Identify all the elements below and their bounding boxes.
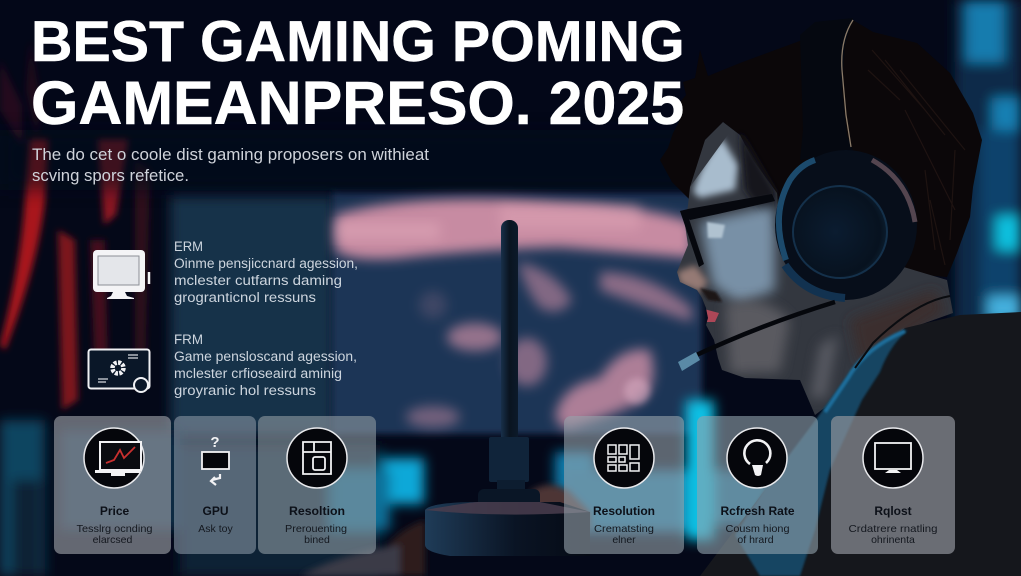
blurred monitor left panel — [170, 195, 335, 435]
card: Refresh Rate — [697, 416, 818, 554]
card: GPU: GPU — [202, 504, 229, 518]
feature text 2: mclester crfioseaird aminig — [174, 366, 342, 381]
glasses — [680, 194, 775, 220]
neck and face — [677, 122, 953, 415]
subtitle: scving spors refetice. — [32, 167, 189, 185]
card: Price: elarcsed — [93, 534, 132, 546]
shoulder hoodie — [700, 312, 1021, 576]
card: Resolution right: Resolution — [593, 504, 655, 518]
icon: floppy frame — [287, 428, 347, 488]
ear cup — [775, 150, 917, 300]
card: GPU: Ask toy — [198, 523, 233, 535]
card: Resolution: bined — [304, 534, 330, 546]
hand behind base — [300, 485, 590, 576]
hoodie blue fold — [735, 330, 908, 576]
hair — [660, 20, 982, 300]
feature text 1: grogranticnol ressuns — [174, 290, 316, 305]
icon: ring and bulb — [727, 428, 787, 488]
card: Rqlost: Crdatrere rnatling — [848, 523, 938, 535]
red streaks left — [0, 40, 150, 410]
feature text 1: Oinme pensjiccnard agession, — [174, 256, 358, 271]
title: BEST GAMING POMING — [31, 10, 685, 74]
card: Rqlost: ohrinenta — [871, 534, 915, 546]
card: Refresh Rate: Rcfresh Rate — [720, 504, 795, 518]
icon: settings screen — [88, 350, 150, 392]
icon: grid — [594, 428, 654, 488]
right side blue lights — [955, 0, 1021, 350]
feature text 2: FRM — [174, 332, 203, 347]
hair brown strands — [868, 50, 965, 265]
card: Refresh Rate: Cousm hiong — [726, 523, 790, 535]
card: Rqlost: Rqlost — [874, 504, 912, 518]
feature text 2: groyranic hol ressuns — [174, 383, 316, 398]
card: Resolution right — [564, 416, 684, 554]
icon: desktop monitor — [93, 250, 149, 299]
card: Refresh Rate: of hrard — [737, 534, 774, 546]
card: Resolution right: Crematsting — [594, 523, 654, 535]
card: Rqlost — [831, 416, 955, 554]
card: Price: Tesslrg ocnding — [76, 523, 153, 535]
necklace — [855, 296, 950, 368]
icon: monitor — [863, 428, 923, 488]
card: Price: Price — [100, 504, 130, 518]
microphone stand object — [425, 220, 590, 556]
title: GAMEANPRESO. 2025 — [31, 69, 684, 137]
card: Resolution right: elner — [612, 534, 636, 546]
feature text 1: ERM — [174, 239, 203, 254]
title — [31, 10, 685, 137]
feature text 2: Game pensloscand agession, — [174, 349, 357, 364]
face lighting — [677, 130, 945, 398]
card: GPU — [174, 416, 256, 554]
subtitle: The do cet o coole dist gaming proposers on withieat — [32, 146, 429, 164]
feature text 1: mclester cutfarns daming — [174, 273, 342, 288]
dark header band — [0, 0, 720, 130]
subtitle — [32, 146, 429, 185]
mic boom — [690, 302, 835, 358]
card: Price — [54, 416, 171, 554]
person — [660, 18, 1021, 576]
feature text 2 — [174, 332, 357, 398]
headband — [800, 18, 855, 160]
feature text 1 — [174, 239, 358, 305]
blurred monitor center — [332, 192, 702, 434]
card: Resolution: Prerouenting — [285, 523, 347, 535]
icon: laptop with chart — [84, 428, 144, 488]
cyan lower glow — [0, 400, 784, 576]
card: Resolution: Resoltion — [289, 504, 345, 518]
icon: screen with arrows: ? — [210, 434, 220, 451]
card: Resolution — [258, 416, 376, 554]
